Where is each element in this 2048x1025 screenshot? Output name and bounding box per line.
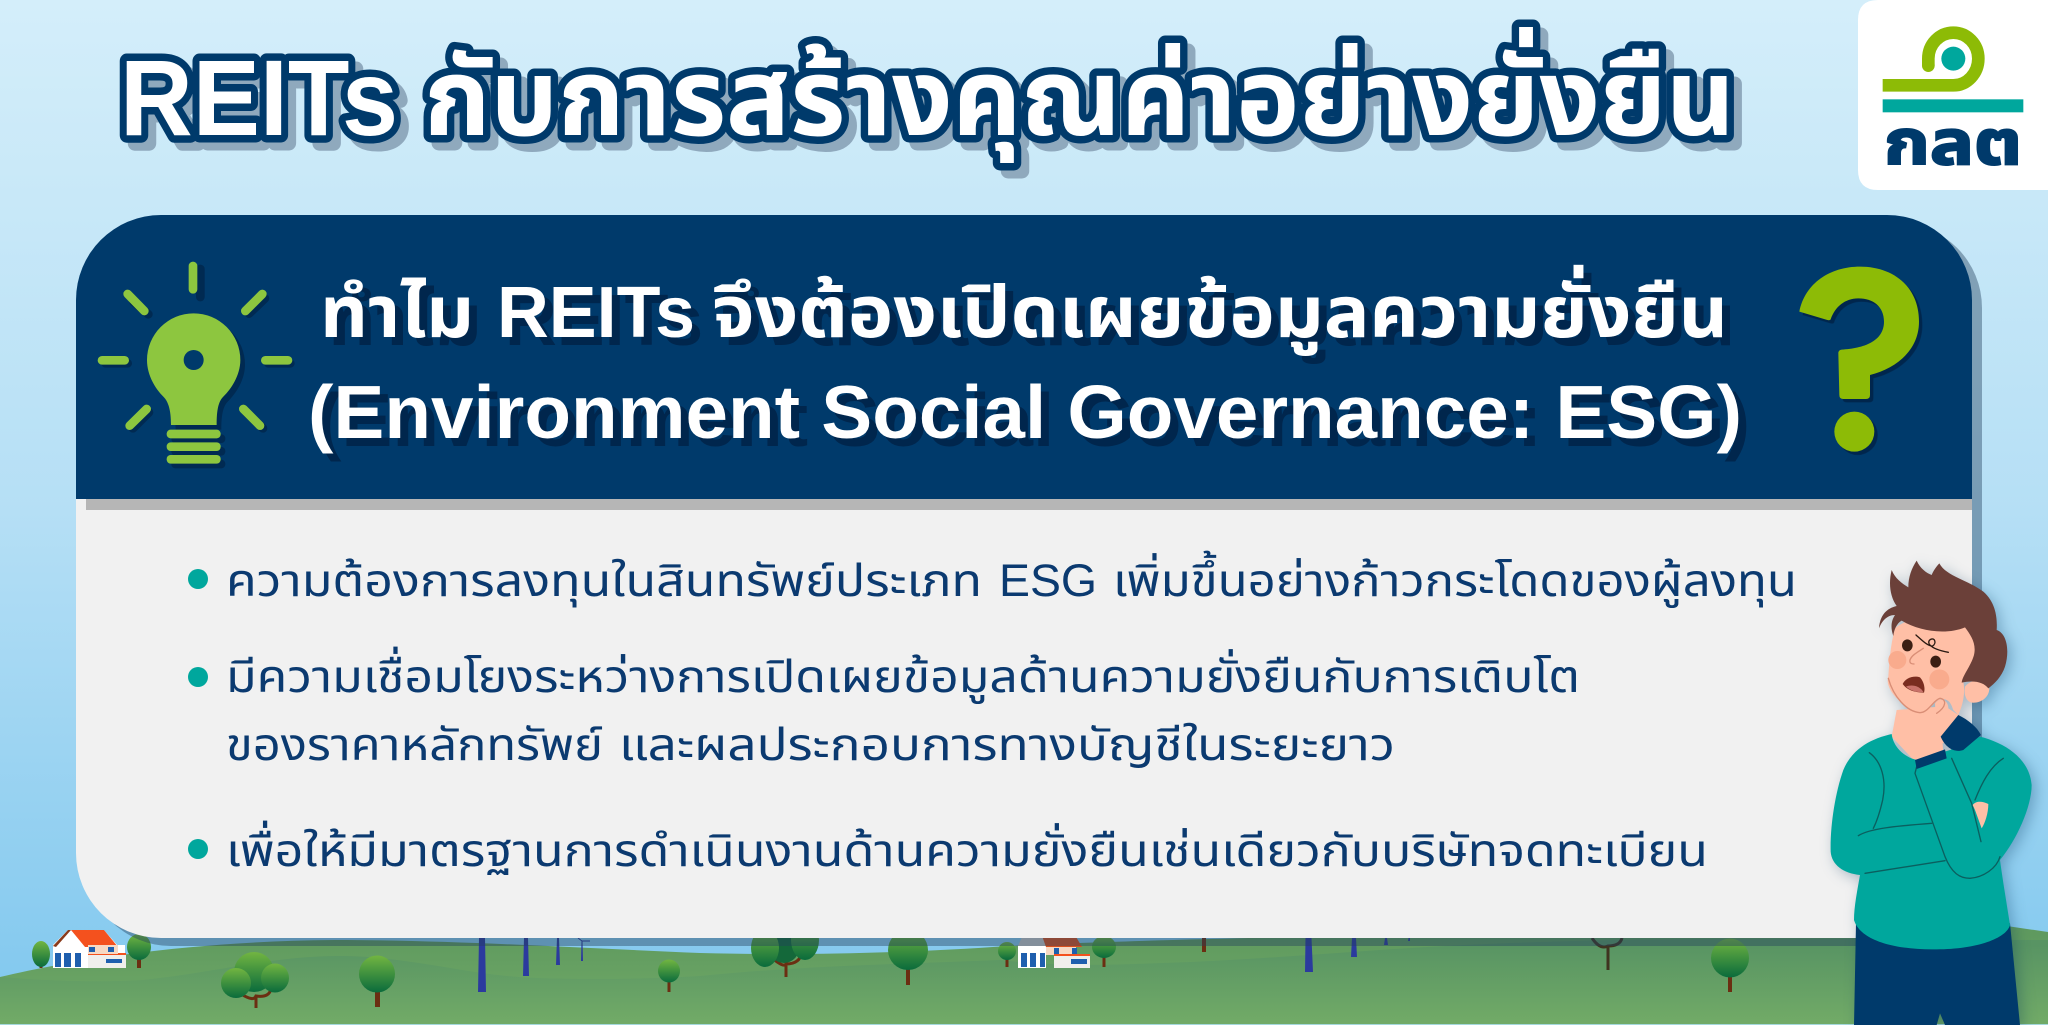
eyebrow squiggle (1916, 635, 1948, 652)
cuff (1915, 749, 1947, 769)
bullet 1: เพิ่มขึ้นอย่างก้าวกระโดดของผู้ลงทุน (1113, 550, 1797, 608)
tree trunk (1202, 938, 1206, 952)
bullet 2 (188, 646, 1580, 770)
eyes (1902, 639, 1941, 668)
bullet 2: ของราคาหลักทรัพย์ (226, 719, 603, 770)
icon: question mark (1799, 267, 1919, 452)
bullet list (188, 550, 1797, 876)
face (1888, 617, 1975, 715)
landscape scene (0, 920, 2048, 1025)
logo background (1858, 0, 2048, 190)
bullet 1: ESG (999, 555, 1097, 606)
tree cluster (221, 952, 289, 1008)
panel (76, 215, 1982, 946)
tree (888, 930, 928, 985)
sweater fold lines (1858, 753, 2003, 878)
house (53, 930, 126, 968)
logo text: กลต (1884, 109, 2022, 178)
bottom edge line (0, 1024, 2048, 1025)
tree cluster (751, 920, 819, 977)
collar cuff (1941, 715, 1981, 751)
panel shadow (86, 223, 1982, 946)
tree (32, 941, 50, 968)
wind turbines (478, 938, 1410, 992)
tree (998, 942, 1016, 967)
bullet 2: มีความเชื่อมโยงระหว่างการเปิดเผยข้อมูลด้านความยั่งยืนกับการเติบโต (226, 646, 1580, 704)
heading: why REITs must disclose (308, 265, 1742, 454)
bullet 2: และผลประกอบการทางบัญชีในระยะยาว (619, 719, 1395, 770)
mouth (1903, 677, 1924, 693)
panel header (76, 215, 1972, 499)
tree (127, 934, 151, 968)
sweater (1831, 734, 2032, 949)
hand (1973, 802, 1988, 828)
header shadow (86, 499, 1972, 510)
title: กับการสร้างคุณค่าอย่างยั่งยืน (424, 27, 1735, 163)
heading: why REITs must disclose: จึงต้องเปิดเผยข้อมูลความยั่งยืน (712, 265, 1728, 356)
icon: light bulb (102, 266, 290, 468)
tree (1092, 936, 1116, 967)
back hill (0, 925, 2048, 1025)
person thinking (1831, 561, 2032, 1025)
logo (1858, 0, 2048, 190)
logo emblem (1883, 33, 2023, 112)
bullet 3: เพื่อให้มีมาตรฐานการดำเนินงานด้านความยั่งยืนเช่นเดียวกับบริษัทจดทะเบียน (226, 820, 1708, 876)
heading: why REITs must disclose: ทำไม (320, 273, 474, 353)
title: REITs (120, 37, 398, 158)
tree (1711, 938, 1749, 992)
tree (658, 960, 680, 992)
nose and jaw (1888, 648, 1945, 713)
house (1018, 930, 1090, 968)
front hill (0, 939, 2048, 1025)
hand on chin (1935, 700, 1958, 743)
tree cluster trunk (1592, 938, 1622, 970)
heading: why REITs must disclose: (Environment Social Governance: ESG) (308, 370, 1742, 454)
heading: why REITs must disclose: REITs (497, 273, 695, 353)
ear (1965, 681, 1989, 703)
pants (1854, 923, 2020, 1025)
hair (1879, 561, 2007, 688)
panel body (76, 490, 1972, 938)
tree (359, 956, 395, 1007)
bullet 1: ความต้องการลงทุนในสินทรัพย์ประเภท (226, 555, 982, 608)
cheeks (1888, 651, 1949, 689)
bullet 1 (188, 550, 1797, 608)
neck (1892, 707, 1943, 763)
